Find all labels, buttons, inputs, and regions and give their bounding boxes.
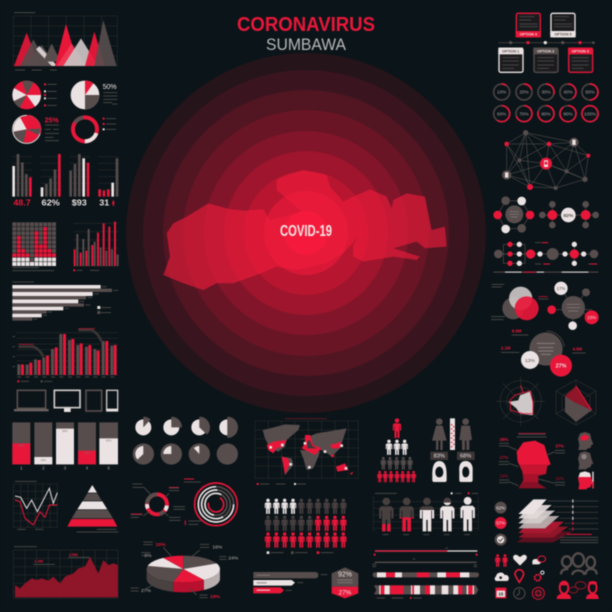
- panel: stacked layers: [517, 499, 598, 543]
- badge 83%: 83%: [434, 454, 445, 460]
- icon: target circle: [532, 587, 544, 599]
- panel: large bubble stats: 4.5M: [573, 347, 583, 352]
- panel: percent gauges: 80%: [541, 111, 551, 116]
- bars 31: 31: [99, 198, 110, 208]
- pie two: [78, 88, 92, 102]
- panel: bubble diagram: 23%: [587, 315, 596, 320]
- option 4: OPTION 4: [520, 33, 538, 37]
- pie one: [19, 88, 34, 102]
- panel: stacked columns: 4: [86, 465, 89, 470]
- panel: percent gauges: 100%: [584, 111, 596, 116]
- panel: people grid: [265, 499, 347, 554]
- panel: area time series: 1.4M: [34, 559, 44, 564]
- hub left: [493, 196, 534, 233]
- panel: venn diagram: [491, 284, 548, 320]
- radial rings: [126, 53, 486, 413]
- pie one legend: [44, 83, 57, 106]
- icon: map pin: [515, 570, 524, 582]
- panel: status badges: [495, 502, 507, 546]
- panel: large bubble stats: 27%: [556, 364, 567, 370]
- panel: network diagram: [502, 130, 590, 190]
- slider red: [374, 548, 478, 556]
- panel: small pie grid: [133, 422, 238, 465]
- band two: [374, 585, 478, 594]
- panel: percent gauges: 70%: [519, 111, 529, 116]
- panel: concentric ring chart: [184, 479, 237, 526]
- bars 48.7: 48.7: [13, 198, 31, 208]
- panel: progress sliders and bands: [373, 548, 479, 599]
- panel: paired bar chart: [73, 222, 119, 271]
- timeline: [498, 41, 595, 44]
- panel: large bubble stats: 13%: [525, 358, 536, 364]
- band one: [373, 572, 479, 577]
- panel: waffle chart: [12, 222, 56, 271]
- icon: gears: [535, 571, 544, 581]
- title: SUMBAWA: [266, 35, 347, 54]
- bars $93: $93: [72, 198, 87, 208]
- icon: woman: [432, 418, 447, 450]
- panel: percent gauges: 40%: [563, 90, 573, 95]
- panel: percent gauges: [494, 84, 598, 122]
- icon: man head: [459, 461, 473, 482]
- panel: stacked columns: 5: [107, 465, 110, 470]
- pie labels: [141, 542, 239, 600]
- panel: horizontal bar chart: [12, 282, 118, 321]
- comparison bar: [450, 418, 455, 450]
- badge 62%: 62%: [496, 505, 505, 510]
- bars 62%: 62%: [41, 198, 60, 208]
- panel: triangle area chart: [13, 13, 117, 70]
- panel: 3D pie chart: [131, 542, 239, 600]
- panel: hexagon stat: [332, 567, 358, 598]
- panel: hexagon stat: 27%: [339, 590, 352, 597]
- panel: stacked columns: 50%: [19, 444, 25, 448]
- pie labels: 10%: [156, 542, 166, 548]
- pie labels: 16%: [212, 545, 223, 551]
- icon: tablet: [86, 390, 102, 411]
- pie labels: 27%: [141, 588, 152, 594]
- panel: arrow labels: [253, 572, 327, 593]
- panel: people column chart: [373, 492, 478, 535]
- panel: stacked columns: 18%: [41, 458, 47, 462]
- panel: bubble diagram: [547, 282, 599, 330]
- pie labels: 24%: [228, 556, 239, 562]
- panel: pie charts: [12, 83, 117, 144]
- panel: large bubble stats: 2.1M: [501, 345, 511, 350]
- panel: pyramid: [67, 485, 118, 532]
- panel: stacked columns: 33%: [84, 451, 90, 455]
- hub right: 92%: [563, 213, 574, 219]
- panel: head infographic: 37%: [555, 444, 564, 449]
- panel: stacked columns: 2: [42, 465, 45, 470]
- icons: small heads: [578, 432, 594, 489]
- pie three: [12, 115, 41, 144]
- option 1: OPTION 1: [502, 50, 519, 54]
- panel: gender comparison: [430, 418, 475, 482]
- panel: flow diagram: [493, 242, 598, 273]
- panel: stacked columns: [12, 422, 118, 470]
- icon: head red and white: [578, 471, 594, 489]
- option 3: OPTION 3: [572, 50, 589, 54]
- panel: option cards: [498, 13, 595, 72]
- timeline band: [493, 271, 598, 274]
- title: [237, 13, 375, 54]
- panel: line chart: [13, 481, 57, 529]
- panel: area time series: [13, 547, 118, 598]
- panel: stacked columns: 1: [20, 465, 23, 470]
- panel: stacked columns: 85%: [62, 429, 68, 433]
- slider grey: [373, 559, 477, 567]
- stat 25%: 25%: [45, 117, 59, 124]
- icon: toilet people: [495, 554, 508, 567]
- panel: stacked columns: 3: [64, 465, 67, 470]
- option 5: OPTION 5: [554, 33, 572, 37]
- panel: head infographic: [499, 433, 565, 488]
- panel: stacked columns: 62%: [106, 439, 112, 443]
- panel: hexagon stat: 92%: [338, 572, 352, 579]
- icon: clock: [514, 588, 525, 599]
- donut legend: [103, 118, 116, 130]
- panel: radar chart right: [556, 380, 596, 425]
- panel: large bubble stats: 8.9M: [512, 329, 522, 334]
- panel: head infographic: 15%: [500, 473, 508, 478]
- icon: head with brain: [578, 432, 593, 450]
- badge 68%: 68%: [460, 454, 471, 460]
- panel: percent gauges: 90%: [563, 111, 573, 116]
- panel: grouped column chart: [12, 329, 118, 382]
- icon: cloud: [495, 573, 509, 581]
- panel: area time series: 2.5M: [69, 552, 78, 557]
- panel: hub diagrams: [493, 196, 599, 233]
- badge 57%: 57%: [496, 521, 505, 526]
- panel: large bubble stats: [501, 329, 586, 377]
- icon: phone: [107, 390, 118, 411]
- icon: chat bubbles: [532, 556, 546, 564]
- panel: radar chart left: [496, 377, 545, 426]
- pie sides: [147, 569, 220, 592]
- panel: bubble diagram: 17%: [557, 286, 565, 291]
- icons: people group grey: [561, 553, 597, 575]
- icons: devices: [14, 390, 118, 412]
- label: COVID-19: COVID-19: [280, 223, 332, 240]
- panel: donut with callouts: [131, 484, 185, 520]
- panel: stat bar charts: [12, 154, 119, 208]
- panel: percent gauges: 20%: [519, 90, 529, 95]
- stat 50%: 50%: [103, 84, 117, 91]
- panel: people pyramid: [377, 418, 416, 482]
- map: Sumbawa: [163, 170, 447, 290]
- panel: world map: [255, 419, 358, 485]
- icon: monitor: [54, 390, 80, 412]
- icon: calendar: 15: [498, 592, 504, 597]
- panel: percent gauges: 10%: [497, 90, 506, 95]
- icon: laptop: [14, 390, 49, 411]
- badge check: [495, 534, 507, 546]
- icon: man: [459, 418, 472, 450]
- donut chart: [73, 117, 97, 141]
- icon: woman head: [432, 461, 447, 482]
- panel: head infographic: 38%: [500, 437, 508, 442]
- icons: people group red: [557, 582, 599, 599]
- panel: head infographic: 11%: [555, 476, 564, 481]
- panel: percent gauges: 50%: [585, 90, 595, 95]
- title: CORONAVIRUS: [237, 13, 375, 36]
- icon: heart: [513, 555, 527, 566]
- callouts: [18, 329, 102, 357]
- pie labels: 19%: [210, 594, 221, 600]
- panel: percent gauges: 60%: [497, 111, 506, 116]
- option 2: OPTION 2: [537, 50, 554, 54]
- pie top: [147, 556, 220, 582]
- icons: small icon grid: [495, 554, 546, 599]
- icon: head grey: [578, 451, 593, 469]
- pie labels: 8%: [144, 553, 152, 559]
- panel: percent gauges: 30%: [541, 90, 551, 95]
- panel: head infographic: 27%: [500, 455, 508, 460]
